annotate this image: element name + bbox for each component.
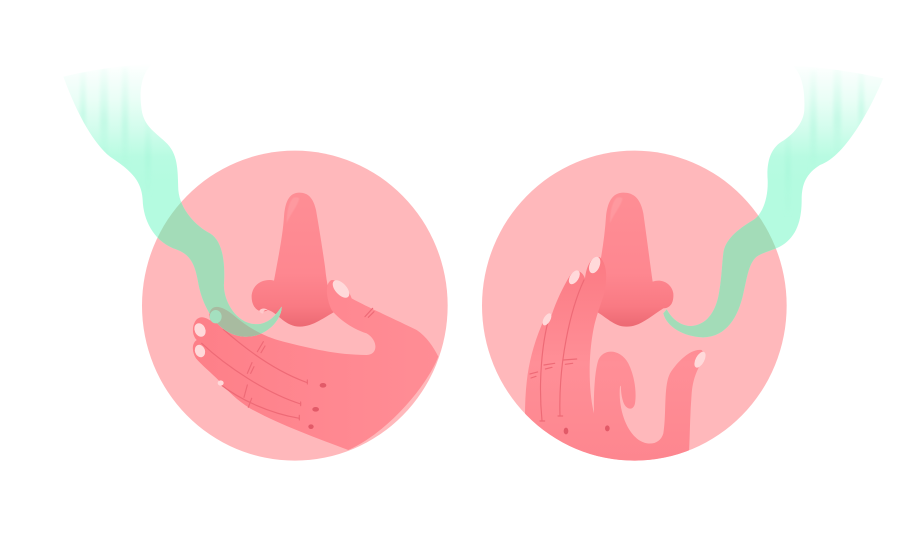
icon: right nose (593, 193, 673, 327)
icon: left nose (252, 193, 335, 327)
fingernails (192, 277, 352, 386)
knuckle dots (564, 425, 610, 434)
right pink circle (482, 151, 787, 461)
index fingernail under smell (210, 310, 222, 323)
panel: right illustration, hand pinching nose (482, 66, 883, 470)
left hand (192, 277, 438, 450)
panel: left illustration, hand wafting smell toward nose (63, 64, 448, 461)
right hand (525, 255, 708, 470)
smell stream inside circle (158, 202, 282, 337)
finger crease lines (530, 280, 584, 421)
finger crease lines (202, 308, 374, 420)
left pink circle (142, 151, 448, 461)
smell stream over hand (210, 307, 261, 337)
knuckle dots (308, 383, 326, 429)
right smell stream (663, 66, 883, 337)
faint streaks in smell stream (810, 74, 865, 144)
fingernails (541, 255, 708, 369)
left smell stream (63, 64, 282, 337)
faint streaks in smell stream (80, 74, 150, 156)
smell stream inside circle (663, 216, 776, 338)
